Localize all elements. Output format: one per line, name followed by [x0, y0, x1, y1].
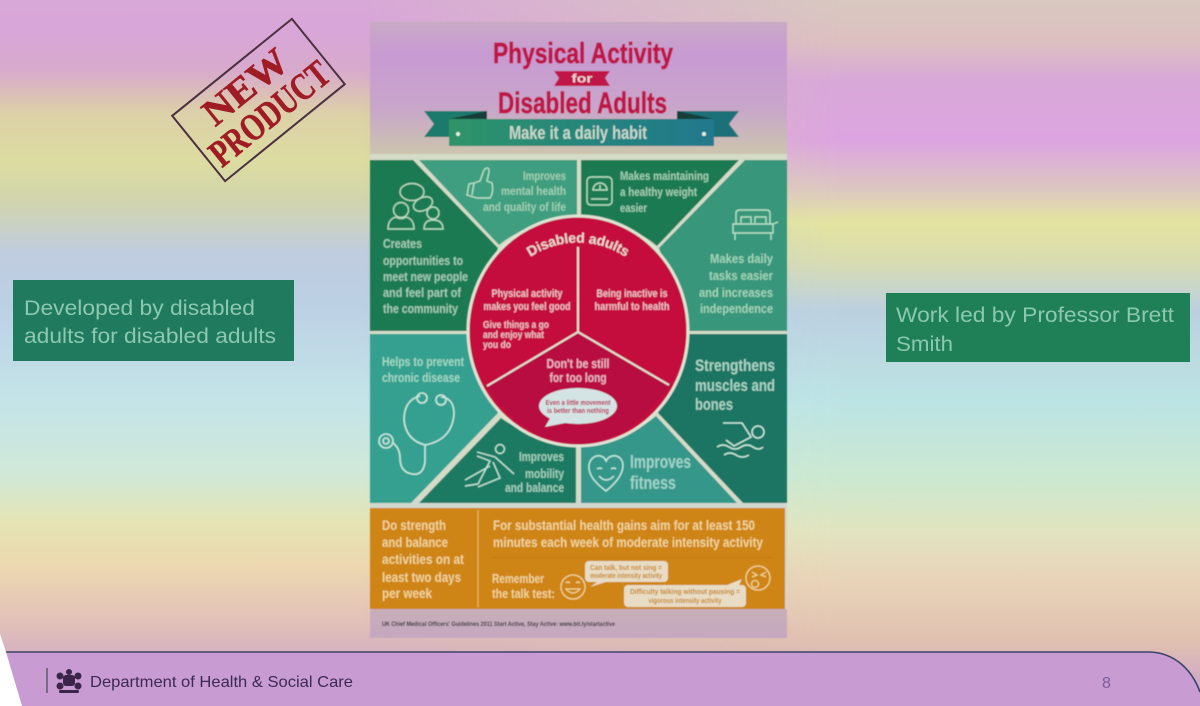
panel: fitness: [581, 416, 737, 503]
icon: person moving: [465, 444, 514, 487]
text: physical activity: makes you feel good: [484, 301, 570, 313]
callout: work led by: Smith: [896, 333, 953, 356]
text: strength and balance: activities on at: [382, 551, 464, 567]
text: creates opportunities: Creates: [383, 236, 422, 251]
poster title: for: [572, 72, 593, 86]
speech bubble: moderate: [585, 561, 668, 587]
heading: disabled adults: Disabled adults: [525, 232, 630, 258]
slide footer band: [0, 634, 1200, 706]
text: creates opportunities: [383, 236, 468, 316]
speech bubble: is better than nothing: [547, 408, 609, 415]
text: fitness: fitness: [630, 473, 676, 493]
text: mobility: [505, 449, 565, 495]
text: daily tasks: independence: [700, 301, 773, 316]
panel: muscles and bones: [658, 334, 787, 503]
text: being inactive: [594, 288, 670, 313]
text: daily tasks: tasks easier: [709, 268, 773, 283]
text: creates opportunities: meet new people: [383, 269, 468, 284]
text: mental health: and quality of life: [483, 200, 566, 214]
text: muscles and bones: muscles and: [695, 376, 775, 395]
text: don't be still: [546, 356, 610, 385]
text: creates opportunities: the community: [383, 301, 459, 316]
icon: puffing face: [746, 566, 770, 590]
panel: creates opportunities: [370, 160, 498, 331]
poster title: Physical Activity: [493, 38, 673, 70]
panel: chronic disease: [370, 334, 498, 503]
page number: 8: [1102, 675, 1111, 692]
text: fitness: Improves: [630, 452, 691, 472]
text: mental health: Improves: [523, 169, 566, 183]
text: talk test: Remember: [492, 571, 544, 586]
speech bubble: vigorous: vigorous intensity activity: [648, 598, 722, 605]
icon: bed: [733, 210, 778, 240]
text: mobility: and balance: [505, 480, 564, 495]
speech bubble: moderate: Can talk, but not sing =: [590, 565, 662, 572]
text: being inactive: Being inactive is: [596, 288, 668, 300]
department name: Department of Health & Social Care: [90, 674, 353, 691]
ribbon banner: Make it a daily habit: [509, 123, 647, 143]
text: 150 minutes: [493, 517, 763, 550]
text: daily tasks: [699, 251, 774, 316]
text: healthy weight: a healthy weight: [620, 185, 697, 199]
text: don't be still: Don't be still: [546, 356, 610, 371]
text: chronic disease: chronic disease: [382, 370, 460, 385]
poster: [369, 22, 788, 638]
text: physical activity: you do: [483, 340, 511, 351]
panel: daily tasks: [659, 160, 787, 331]
callout: work led by: [886, 293, 1190, 362]
text: physical activity: Physical activity: [492, 288, 563, 300]
text: physical activity: Give things a go: [483, 320, 549, 331]
poster source line: [370, 609, 787, 638]
icon: weighing scales: [587, 177, 612, 205]
text: healthy weight: easier: [620, 201, 647, 215]
icon: swimmer: [717, 423, 764, 457]
text: fitness: [630, 452, 691, 493]
new product stamp: PRODUCT: [201, 53, 339, 175]
icon: stethoscope: [379, 393, 454, 474]
text: muscles and bones: [695, 356, 775, 414]
panel: mental health: [419, 160, 577, 245]
ribbon banner: [424, 111, 739, 146]
text: muscles and bones: bones: [695, 395, 733, 414]
text: mental health: [483, 169, 566, 214]
text: being inactive: harmful to health: [594, 301, 670, 313]
text: daily tasks: and increases: [699, 285, 773, 300]
text: mobility: Improves: [519, 449, 564, 464]
text: healthy weight: [620, 169, 709, 215]
text: daily tasks: Makes daily: [710, 251, 774, 266]
speech bubble: Even a little movement: [546, 400, 611, 407]
text: physical activity: [483, 288, 570, 351]
text: talk test: the talk test:: [492, 586, 555, 601]
text: healthy weight: Makes maintaining: [620, 169, 709, 183]
text: physical activity: and enjoy what: [483, 330, 545, 341]
panel: mobility and balance: [419, 418, 576, 503]
panel: guidance orange: [370, 508, 785, 609]
text: strength and balance: and balance: [382, 534, 448, 550]
icon: smiling heart: [589, 456, 623, 491]
government department logo and name: [46, 668, 353, 693]
speech bubble: vigorous: Difficulty talking without pausing =: [630, 589, 740, 596]
text: creates opportunities: opportunities to: [383, 253, 463, 268]
text: chronic disease: Helps to prevent: [382, 354, 465, 369]
icon: thumbs up: [467, 168, 493, 198]
text: strength and balance: [382, 517, 464, 601]
callout: developed by disabled adults: adults for disabled adults: [24, 325, 276, 348]
callout: developed by disabled adults: [13, 280, 294, 361]
new product stamp: [172, 19, 345, 181]
icon: royal crest: [56, 669, 82, 693]
text: 150 minutes: For substantial health gains aim for at least 150: [493, 517, 755, 533]
text: strength and balance: per week: [382, 585, 432, 601]
icon: smiling face: [561, 575, 585, 599]
speech bubble: moderate: moderate intensity activity: [590, 573, 662, 580]
new product stamp: NEW: [194, 40, 297, 134]
central circle: [466, 214, 690, 448]
icon: people talking: [388, 184, 443, 229]
poster source line: UK Chief Medical Officers' Guidelines 2011 Start Active, Stay Active: www.bit.ly/startactive: [382, 622, 616, 628]
callout: developed by disabled adults: Developed by disabled: [24, 297, 255, 320]
callout: work led by: Work led by Professor Brett: [896, 304, 1174, 327]
text: strength and balance: least two days: [382, 569, 461, 585]
text: 150 minutes: minutes each week of moderate intensity activity: [493, 534, 763, 550]
text: chronic disease: [382, 354, 465, 385]
text: don't be still: for too long: [550, 370, 607, 385]
text: talk test: [492, 571, 555, 601]
speech bubble: vigorous: [624, 579, 746, 607]
text: muscles and bones: Strengthens: [695, 356, 775, 375]
text: creates opportunities: and feel part of: [383, 285, 462, 300]
text: strength and balance: Do strength: [382, 517, 446, 533]
text: mental health: mental health: [501, 184, 566, 198]
poster title: Disabled Adults: [498, 87, 667, 120]
text: mobility: mobility: [525, 466, 565, 481]
poster title: [493, 38, 673, 120]
panel: healthy weight: [581, 160, 739, 246]
speech bubble: [539, 388, 617, 427]
